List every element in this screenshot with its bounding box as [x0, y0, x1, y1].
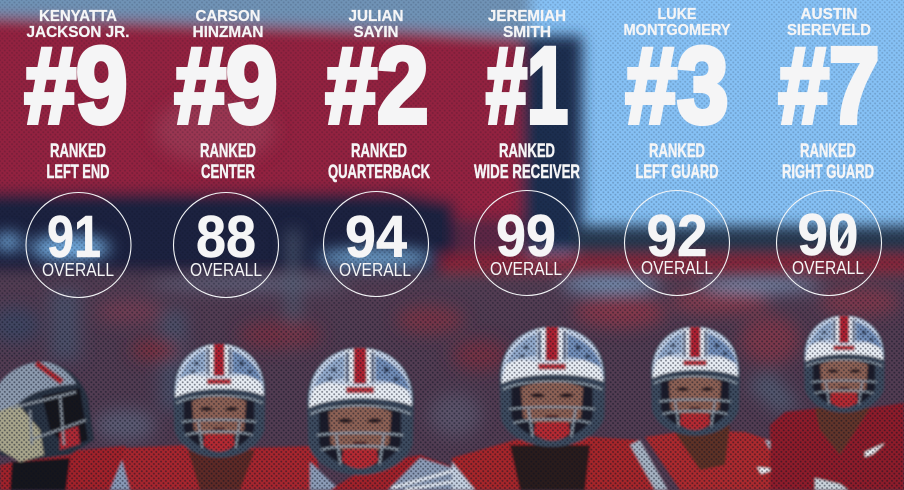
name: SMITH: [503, 24, 551, 41]
overall rating circle: [26, 192, 131, 298]
player 5: helmet and jersey: [645, 326, 803, 490]
name: [787, 6, 871, 39]
position label: QUARTERBACK: [328, 161, 430, 183]
overall rating circle: OVERALL: [641, 258, 713, 278]
column: Kenyatta Jackson Jr.: [24, 8, 131, 298]
rank number: #3: [626, 24, 728, 146]
column: Luke Montgomery: [624, 6, 731, 296]
name: AUSTIN: [800, 6, 858, 23]
overall rating circle: [324, 192, 428, 296]
position label: RANKED: [200, 140, 256, 162]
players photo: [0, 315, 904, 490]
overall rating circle: [624, 190, 730, 296]
name: JACKSON JR.: [26, 24, 130, 41]
rank number: #7: [778, 24, 880, 146]
column: Austin Siereveld: [776, 6, 882, 296]
name: JULIAN: [348, 8, 404, 25]
position label: LEFT GUARD: [636, 161, 718, 183]
column: Carson Hinzman: [174, 8, 278, 298]
name: [348, 8, 404, 41]
overall rating circle: 90: [798, 202, 858, 268]
position label: RANKED: [800, 140, 856, 162]
overall rating circle: [174, 192, 278, 298]
position label: LEFT END: [46, 161, 110, 183]
name: LUKE: [658, 6, 696, 23]
overall rating circle: 88: [196, 204, 256, 270]
player 1: left helmet and jersey: [0, 362, 135, 490]
player 6: helmet and jersey: [770, 315, 904, 490]
name: KENYATTA: [39, 8, 117, 25]
name: HINZMAN: [192, 24, 264, 41]
position label: RANKED: [351, 140, 407, 162]
position label: [636, 140, 718, 183]
overall rating circle: 92: [646, 203, 708, 269]
player 2: helmet and jersey: [110, 343, 340, 490]
name: [26, 8, 130, 41]
overall rating circle: OVERALL: [339, 260, 411, 280]
overall rating circle: OVERALL: [792, 258, 864, 278]
overall rating circle: OVERALL: [190, 260, 262, 280]
overall rating circle: [474, 190, 580, 296]
column: Julian Sayin: [324, 8, 430, 296]
player 3: helmet and jersey: [307, 347, 476, 490]
rank number: #1: [486, 24, 568, 146]
name: SIEREVELD: [787, 22, 871, 39]
overall rating circle: 99: [496, 203, 556, 269]
position label: CENTER: [201, 161, 255, 183]
overall rating circle: OVERALL: [490, 259, 562, 279]
overall rating circle: [776, 190, 882, 296]
position label: RANKED: [499, 140, 555, 162]
column: Jeremiah Smith: [474, 8, 580, 296]
name: SAYIN: [354, 24, 398, 41]
position label: [328, 140, 430, 183]
rank number: #9: [24, 24, 128, 146]
position label: [474, 140, 580, 183]
position label: [46, 140, 110, 183]
rank number: #9: [174, 24, 278, 146]
overall rating circle: 94: [345, 204, 407, 270]
name: JEREMIAH: [488, 8, 566, 25]
rank number: #2: [326, 24, 428, 146]
name: [624, 6, 731, 39]
position label: RANKED: [50, 140, 106, 162]
overall rating circle: OVERALL: [42, 260, 114, 280]
overall rating circle: 91: [47, 204, 101, 270]
name: [192, 8, 264, 41]
position label: [200, 140, 256, 183]
position label: WIDE RECEIVER: [474, 161, 580, 183]
player 4: helmet and jersey: [452, 326, 668, 490]
position label: RANKED: [649, 140, 705, 162]
name: MONTGOMERY: [624, 22, 731, 39]
name: CARSON: [196, 8, 260, 25]
name: [488, 8, 566, 41]
position label: [782, 140, 874, 183]
